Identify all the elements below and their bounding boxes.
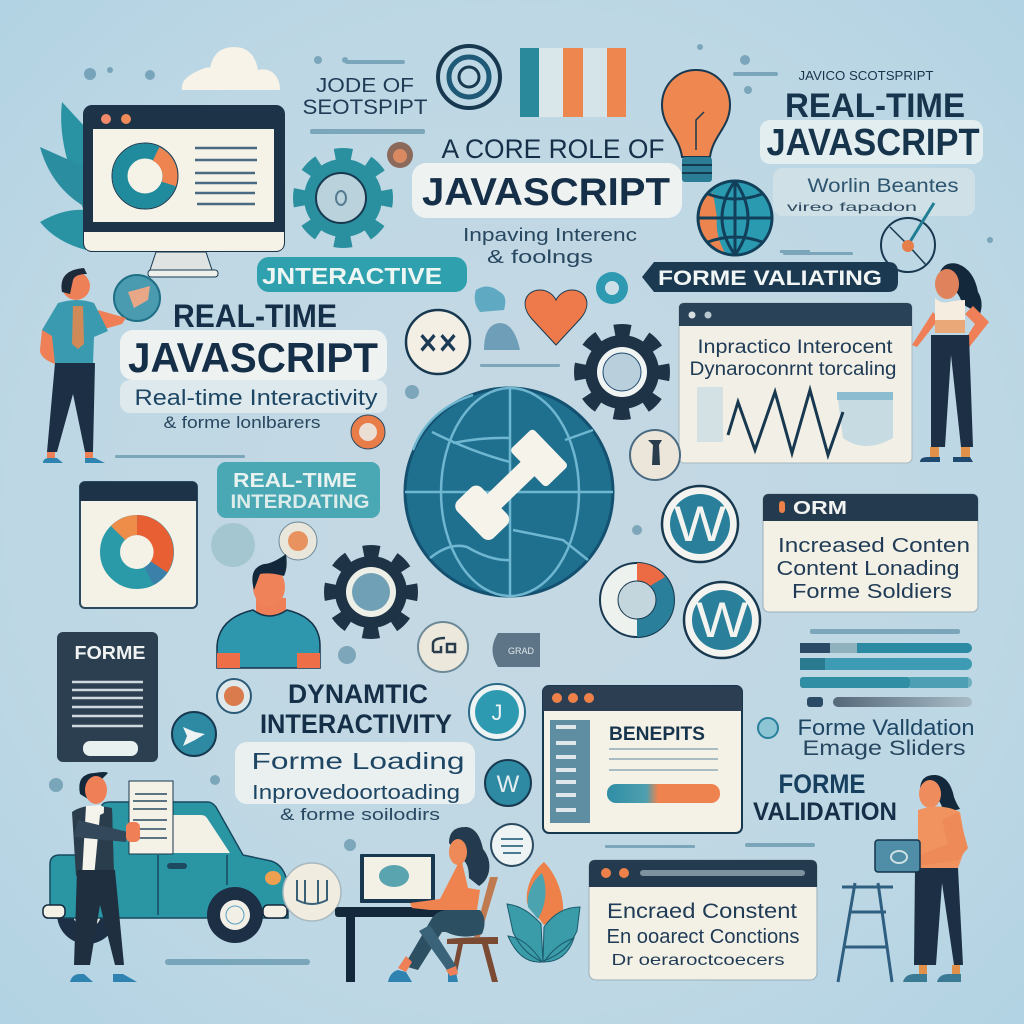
- title: JAVASCRIPT: [422, 171, 670, 214]
- window: dynamic content chart: [679, 303, 912, 463]
- window: orm: Forme Soldiers: [792, 581, 952, 603]
- icon: monitor with donut chart: [40, 102, 285, 277]
- icon: link badge: ✕✕: [418, 328, 458, 359]
- tag: grey label: [492, 633, 540, 667]
- subtitle: & foolngs: [487, 247, 593, 267]
- text: dynamic interactivity: [235, 679, 475, 824]
- icon: small badge: [387, 142, 413, 168]
- central globe: [405, 388, 613, 596]
- window: orm: Content Lonading: [776, 558, 960, 580]
- icon: light bulb: [662, 70, 730, 182]
- text: forme validation: Forme Valldation: [798, 715, 974, 740]
- pill: real-time interating: [217, 462, 380, 518]
- icon: wordpress circle upper: [662, 486, 738, 562]
- figure: man bust: [217, 554, 320, 668]
- window: enhanced content: Dr oeraroctcoecers: [612, 952, 784, 969]
- panel: forme dark card: FORME: [74, 643, 146, 663]
- icons: side badges: W: [497, 771, 520, 798]
- text: real-time javascript top right: REAL-TIME: [785, 87, 965, 125]
- icon: glasses badge: [418, 622, 468, 672]
- text: real-time javascript top right: JAVASCRIPT: [766, 122, 980, 164]
- text: real-time javascript left: JAVASCRIPT: [128, 334, 378, 381]
- text: jode of seotspipt: [302, 75, 428, 119]
- icon: wordpress circle lower: [684, 582, 760, 658]
- icons: side badges: J: [492, 700, 502, 725]
- title: A CORE ROLE OF: [442, 134, 664, 164]
- icon: car: [43, 802, 288, 944]
- icon: wrench: [452, 428, 569, 543]
- icon: plant: [507, 862, 580, 962]
- text: worlin beantes: Worlin Beantes: [808, 176, 958, 197]
- tag: grey label: GRAD: [508, 646, 534, 656]
- pill: forme valiating: [642, 262, 898, 292]
- icon: target: [438, 46, 500, 108]
- icons: side badges: [469, 684, 533, 866]
- icon: colour bars: [520, 48, 626, 117]
- icon: bars badge: [283, 863, 341, 921]
- chart: horizontal bars: [800, 643, 972, 707]
- window: dynamic content chart: Dynaroconrnt torcaling: [690, 359, 896, 380]
- figure: woman right: [912, 263, 989, 462]
- pill: real-time interating: REAL-TIME: [233, 470, 357, 492]
- window: enhanced content: Encraed Constent: [607, 900, 797, 923]
- title: [412, 134, 682, 218]
- icon: small globe: [698, 181, 772, 255]
- icon: heart: [525, 290, 587, 345]
- text: worlin beantes: vireo fapadon: [787, 200, 917, 214]
- figure: woman at desk: [335, 827, 498, 982]
- text: real-time javascript left: & forme lonlbarers: [164, 413, 320, 432]
- text: jode of seotspipt: SEOTSPIPT: [302, 96, 428, 119]
- icon: cloud: [182, 47, 280, 90]
- icon: wordpress circle lower: W: [696, 592, 749, 648]
- icon: dark gear: [580, 330, 664, 414]
- text: worlin beantes: [773, 168, 975, 216]
- text: dynamic interactivity: Inprovedoortoading: [252, 782, 460, 804]
- icon: ladder: [838, 883, 893, 982]
- text: forme validation: Emage Sliders: [802, 737, 966, 760]
- figure: man with document: [70, 772, 173, 982]
- window: enhanced content: En ooarect Conctions: [606, 926, 800, 948]
- text: jode of seotspipt: JODE OF: [316, 75, 414, 97]
- text: real-time javascript top right: [760, 68, 983, 164]
- subtitle: Inpaving Interenc: [463, 225, 637, 245]
- window: orm: Increased Conten: [778, 535, 970, 557]
- pill: forme valiating: FORME VALIATING: [658, 267, 882, 290]
- icon: donut circle: [600, 563, 674, 637]
- pill: real-time interating: INTERDATING: [230, 492, 370, 513]
- panel: forme dark card: [57, 632, 158, 762]
- icon: orange badge: [351, 415, 385, 449]
- icon: teal gear: [299, 154, 387, 242]
- text: real-time javascript top right: JAVICO SCOTSPRIPT: [798, 68, 934, 83]
- icon: small teal icons: [475, 272, 628, 350]
- subtitle: [463, 225, 637, 267]
- text: real-time javascript left: REAL-TIME: [173, 298, 337, 334]
- window: donut chart: [80, 482, 197, 608]
- text: dynamic interactivity: INTERACTIVITY: [260, 709, 452, 739]
- text: forme validation: [753, 715, 974, 826]
- window: dynamic content chart: Inpractico Interocent: [698, 337, 893, 358]
- window: orm: ORM: [793, 498, 847, 518]
- text: dynamic interactivity: Forme Loading: [252, 748, 464, 774]
- icon: wordpress circle upper: W: [674, 496, 727, 552]
- icon: dark gear lower: [330, 551, 412, 633]
- window: orm: [763, 494, 978, 612]
- icon: target with pointer: [881, 203, 935, 272]
- text: dynamic interactivity: DYNAMTIC: [288, 679, 428, 709]
- icon: cream badge right of globe: [630, 430, 680, 480]
- figure: man left: [40, 268, 160, 463]
- text: forme validation: FORME: [778, 769, 866, 799]
- icons: small badges: [211, 522, 317, 567]
- figure: woman with tablet: [875, 775, 968, 982]
- text: real-time javascript left: [120, 298, 387, 432]
- window: enhanced content: [589, 860, 817, 980]
- icon: link badge: [406, 310, 470, 374]
- text: forme validation: VALIDATION: [753, 798, 897, 826]
- pill: interactive: [257, 257, 467, 292]
- window: benefits: BENEPITS: [609, 724, 705, 745]
- icon: arrow badge: [172, 712, 216, 756]
- icon: small orange badge: [217, 679, 251, 713]
- pill: interactive: JNTERACTIVE: [262, 263, 442, 289]
- text: dynamic interactivity: & forme soilodirs: [280, 805, 440, 824]
- text: real-time javascript left: Real-time Interactivity: [134, 385, 378, 410]
- window: benefits: [543, 686, 742, 833]
